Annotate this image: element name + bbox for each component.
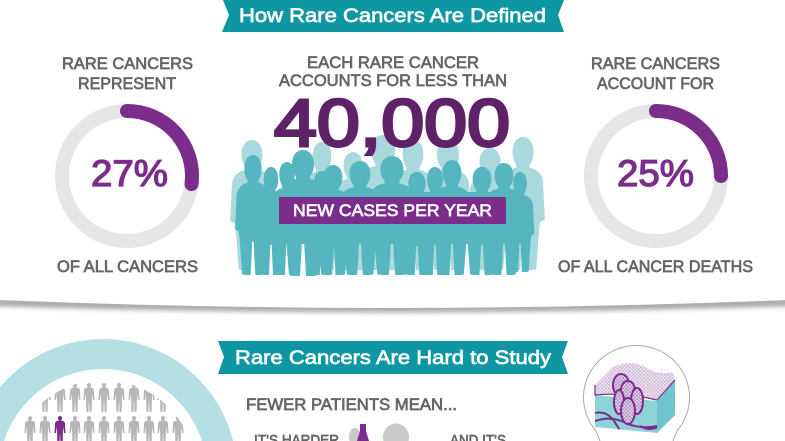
icon: tissue sample in magnifier bbox=[584, 345, 689, 441]
heading: rare cancers account for: RARE CANCERS bbox=[591, 55, 720, 73]
donut chart: 27%: 27% bbox=[91, 153, 168, 194]
banner: new cases per year bbox=[279, 197, 506, 224]
tissue block bbox=[595, 363, 675, 436]
caption: of all cancer deaths: OF ALL CANCER DEATHS bbox=[558, 258, 753, 276]
ribbon heading: Rare Cancers Are Hard to Study: Rare Cancers Are Hard to Study bbox=[235, 347, 551, 369]
heading: each rare cancer accounts for less than bbox=[279, 54, 507, 90]
icon: researcher figures bbox=[349, 424, 409, 441]
donut chart: 27% bbox=[62, 111, 192, 241]
donut chart: 25% bbox=[591, 111, 721, 241]
panel: 40,000 new cases per year bbox=[230, 54, 545, 276]
donut chart: 25%: 25% bbox=[617, 153, 694, 194]
ribbon heading: Rare Cancers Are Hard to Study bbox=[218, 341, 568, 374]
ribbon heading: How Rare Cancers Are Defined bbox=[222, 0, 564, 32]
heading: rare cancers account for bbox=[591, 55, 720, 93]
banner: new cases per year: NEW CASES PER YEAR bbox=[293, 202, 492, 220]
panel: 25% of all cancer deaths bbox=[558, 55, 753, 276]
section divider: curved panel edge with shadow bbox=[0, 0, 785, 312]
ribbon heading: How Rare Cancers Are Defined: How Rare Cancers Are Defined bbox=[239, 6, 546, 27]
people grid, one highlighted in purple bbox=[24, 383, 184, 441]
caption: of all cancers: OF ALL CANCERS bbox=[57, 258, 198, 276]
heading: each rare cancer accounts for less than: ACCOUNTS FOR LESS THAN bbox=[279, 72, 507, 90]
heading: rare cancers account for: ACCOUNT FOR bbox=[597, 75, 714, 93]
big number: 40,000: 40,000 bbox=[274, 86, 510, 161]
heading: rare cancers represent: REPRESENT bbox=[78, 75, 176, 93]
heading: rare cancers represent: RARE CANCERS bbox=[62, 55, 193, 73]
subheading: fewer patients mean: FEWER PATIENTS MEAN... bbox=[246, 396, 457, 414]
heading: each rare cancer accounts for less than: EACH RARE CANCER bbox=[307, 54, 479, 72]
ring with grid of people bbox=[0, 354, 222, 441]
heading: rare cancers represent bbox=[62, 55, 193, 93]
illustration: front row of people bbox=[235, 150, 534, 276]
panel: 27% of all cancers bbox=[57, 55, 198, 276]
illustration: back row of people bbox=[230, 135, 545, 270]
